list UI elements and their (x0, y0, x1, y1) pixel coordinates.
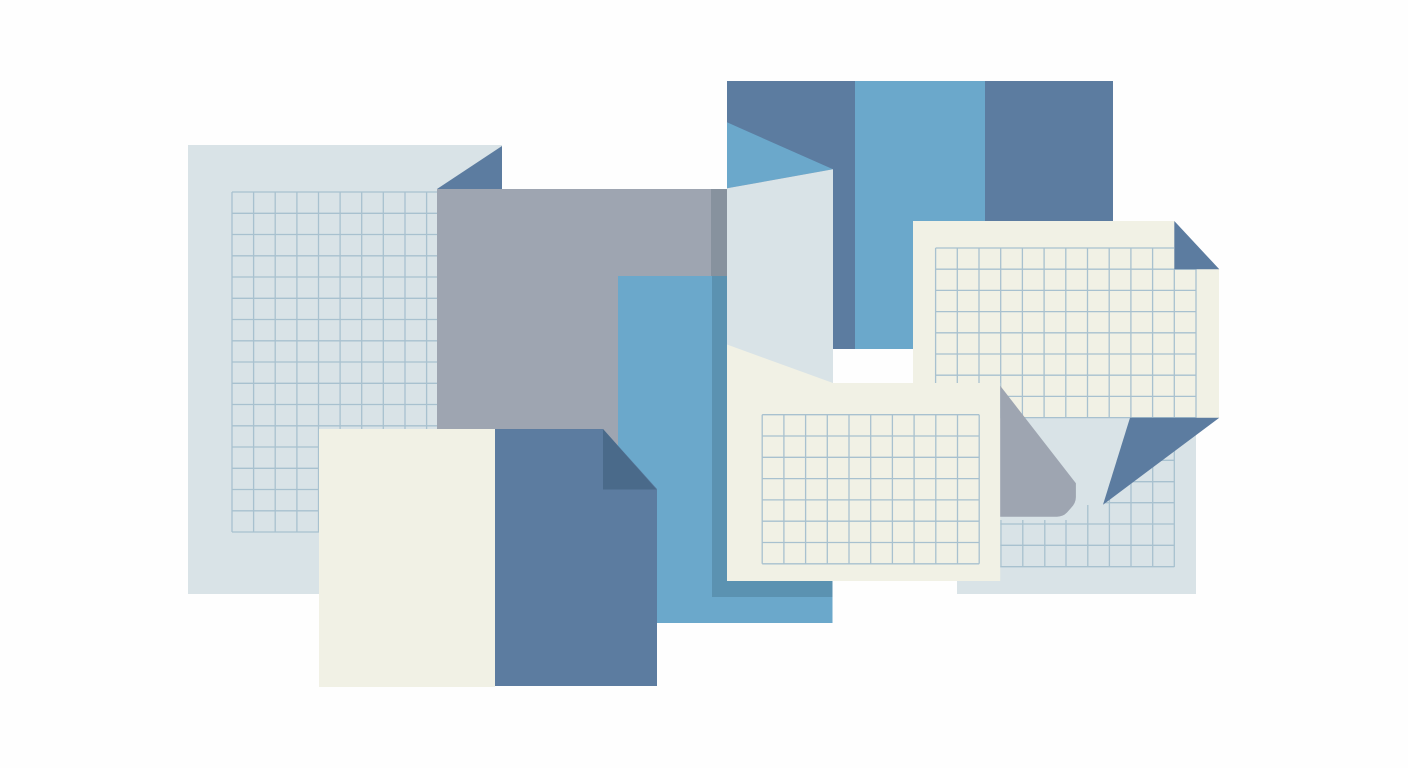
icon: bottom-left folded corner (603, 429, 656, 490)
panel: left pale graph sheet (188, 145, 502, 594)
grid: left sheet (232, 192, 437, 532)
cream half (319, 429, 495, 687)
grid: lower-right sheet (1000, 400, 1174, 567)
icon: blue folded flap (727, 122, 833, 188)
icon: blue triangular flap (1103, 418, 1219, 505)
pale funnel patch (1000, 418, 1130, 520)
panel: grey sheet (437, 189, 727, 469)
panel: blue sheet (618, 276, 832, 623)
panel: upper-right cream graph sheet (913, 221, 1219, 418)
panel: bottom-left two-tone sheet (319, 429, 657, 687)
panel: top striped sheet (727, 81, 1113, 349)
icon: upper-right folded corner (1174, 221, 1219, 269)
blue sheet shaded overlap (712, 276, 832, 597)
blue half (495, 429, 657, 686)
panel: pale folded flap (727, 169, 833, 400)
grid: upper-right sheet (936, 248, 1196, 418)
grey sheet shaded strip (711, 189, 727, 276)
grid: lower cream sheet (762, 415, 979, 564)
panel: lower cream graph sheet (727, 344, 1000, 581)
panel: lower-right pale graph sheet (957, 400, 1196, 594)
icon: left sheet folded corner (437, 146, 502, 189)
icon: grey rounded flap (1000, 386, 1076, 517)
